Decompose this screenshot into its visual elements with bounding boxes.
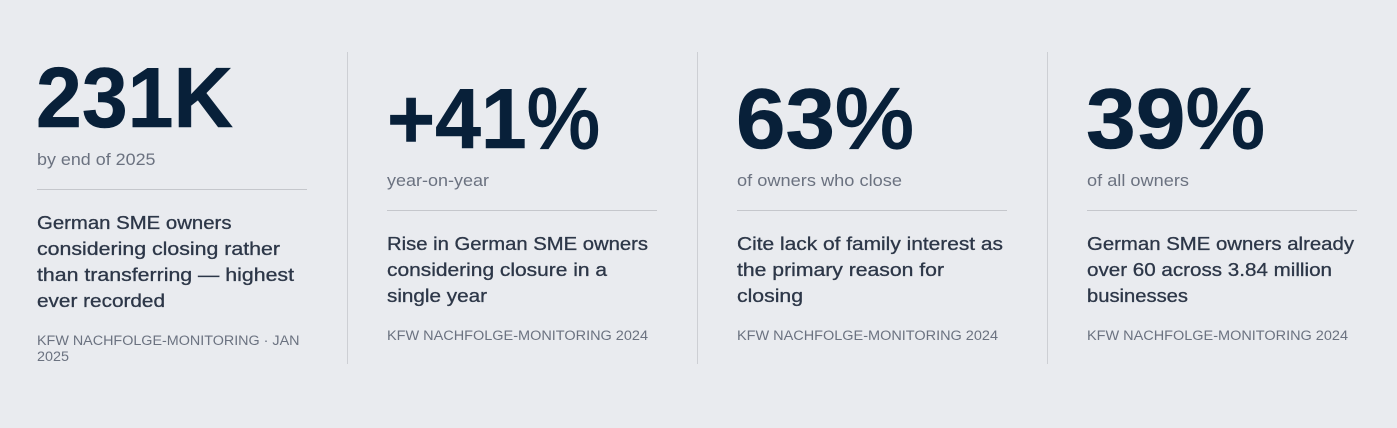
source: KFW NACHFOLGE-MONITORING · JAN: [37, 333, 300, 348]
description: [37, 213, 294, 311]
panel: 39% stat: [1086, 72, 1354, 343]
description: [1087, 234, 1354, 306]
sublabel: of all owners: of all owners: [1087, 171, 1189, 190]
big number: 63%: 63%: [736, 72, 914, 167]
description: considering closure in a: [387, 260, 608, 280]
description: than transferring — highest: [37, 265, 294, 285]
description: over 60 across 3.84 million: [1087, 260, 1332, 280]
big number: 39%: 39%: [1086, 72, 1265, 167]
description: closing: [737, 286, 803, 306]
description: considering closing rather: [37, 239, 280, 259]
source: KFW NACHFOLGE-MONITORING 2024: [1087, 328, 1349, 343]
panel: +41% stat: [387, 72, 649, 343]
description: Cite lack of family interest as: [737, 234, 1003, 254]
description: [387, 234, 648, 306]
description: [737, 234, 1003, 306]
description: German SME owners already: [1087, 234, 1354, 254]
panel: 231K stat: [36, 51, 300, 364]
source: [37, 333, 300, 364]
big number: +41%: +41%: [387, 72, 600, 167]
description: the primary reason for: [737, 260, 944, 280]
sublabel: year-on-year: year-on-year: [387, 171, 490, 190]
panel: 63% stat: [736, 72, 1003, 343]
sublabel: by end of 2025: by end of 2025: [37, 150, 156, 169]
source: KFW NACHFOLGE-MONITORING 2024: [387, 328, 649, 343]
description: German SME owners: [37, 213, 232, 233]
source: KFW NACHFOLGE-MONITORING 2024: [737, 328, 999, 343]
source: 2025: [37, 349, 69, 364]
sublabel: of owners who close: of owners who close: [737, 171, 902, 190]
description: businesses: [1087, 286, 1188, 306]
big number: 231K: 231K: [36, 51, 233, 146]
description: ever recorded: [37, 291, 165, 311]
description: Rise in German SME owners: [387, 234, 648, 254]
description: single year: [387, 286, 487, 306]
